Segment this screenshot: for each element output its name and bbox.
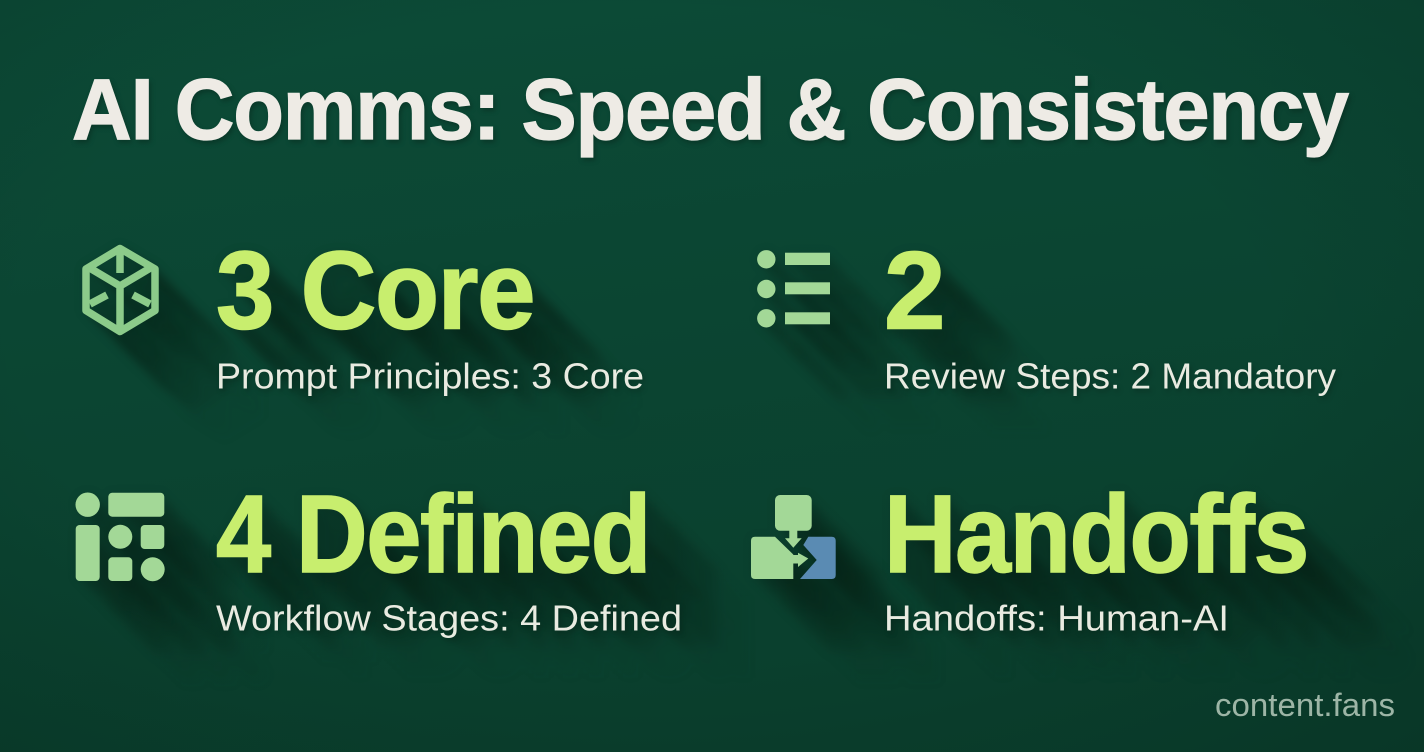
- label: review steps: Review Steps: 2 Mandatory: [884, 356, 1336, 396]
- icon: handoff flow: [751, 495, 836, 579]
- stat: 4 Defined: 4 Defined: [216, 473, 650, 596]
- label: prompt principles: Prompt Principles: 3 Core: [216, 356, 644, 396]
- label: handoffs: Handoffs: Human-AI: [884, 598, 1229, 638]
- stat: 3 Core: 3 Core: [216, 230, 534, 352]
- watermark: content.fans: [1215, 687, 1395, 723]
- stat: 2: 2: [884, 230, 944, 352]
- panel: prompt principles: [86, 230, 644, 396]
- icon: hexagonal cube: [86, 248, 155, 332]
- icon: block grid: [76, 492, 165, 581]
- panel: review steps: [757, 230, 1336, 396]
- stat: Handoffs: Handoffs: [884, 473, 1308, 596]
- icon: list: [757, 250, 830, 327]
- title: AI Comms: Speed & Consistency: [72, 62, 1349, 158]
- label: workflow stages: Workflow Stages: 4 Defined: [216, 598, 682, 638]
- panel: workflow stages: [76, 473, 682, 638]
- panel: handoffs: [751, 473, 1308, 638]
